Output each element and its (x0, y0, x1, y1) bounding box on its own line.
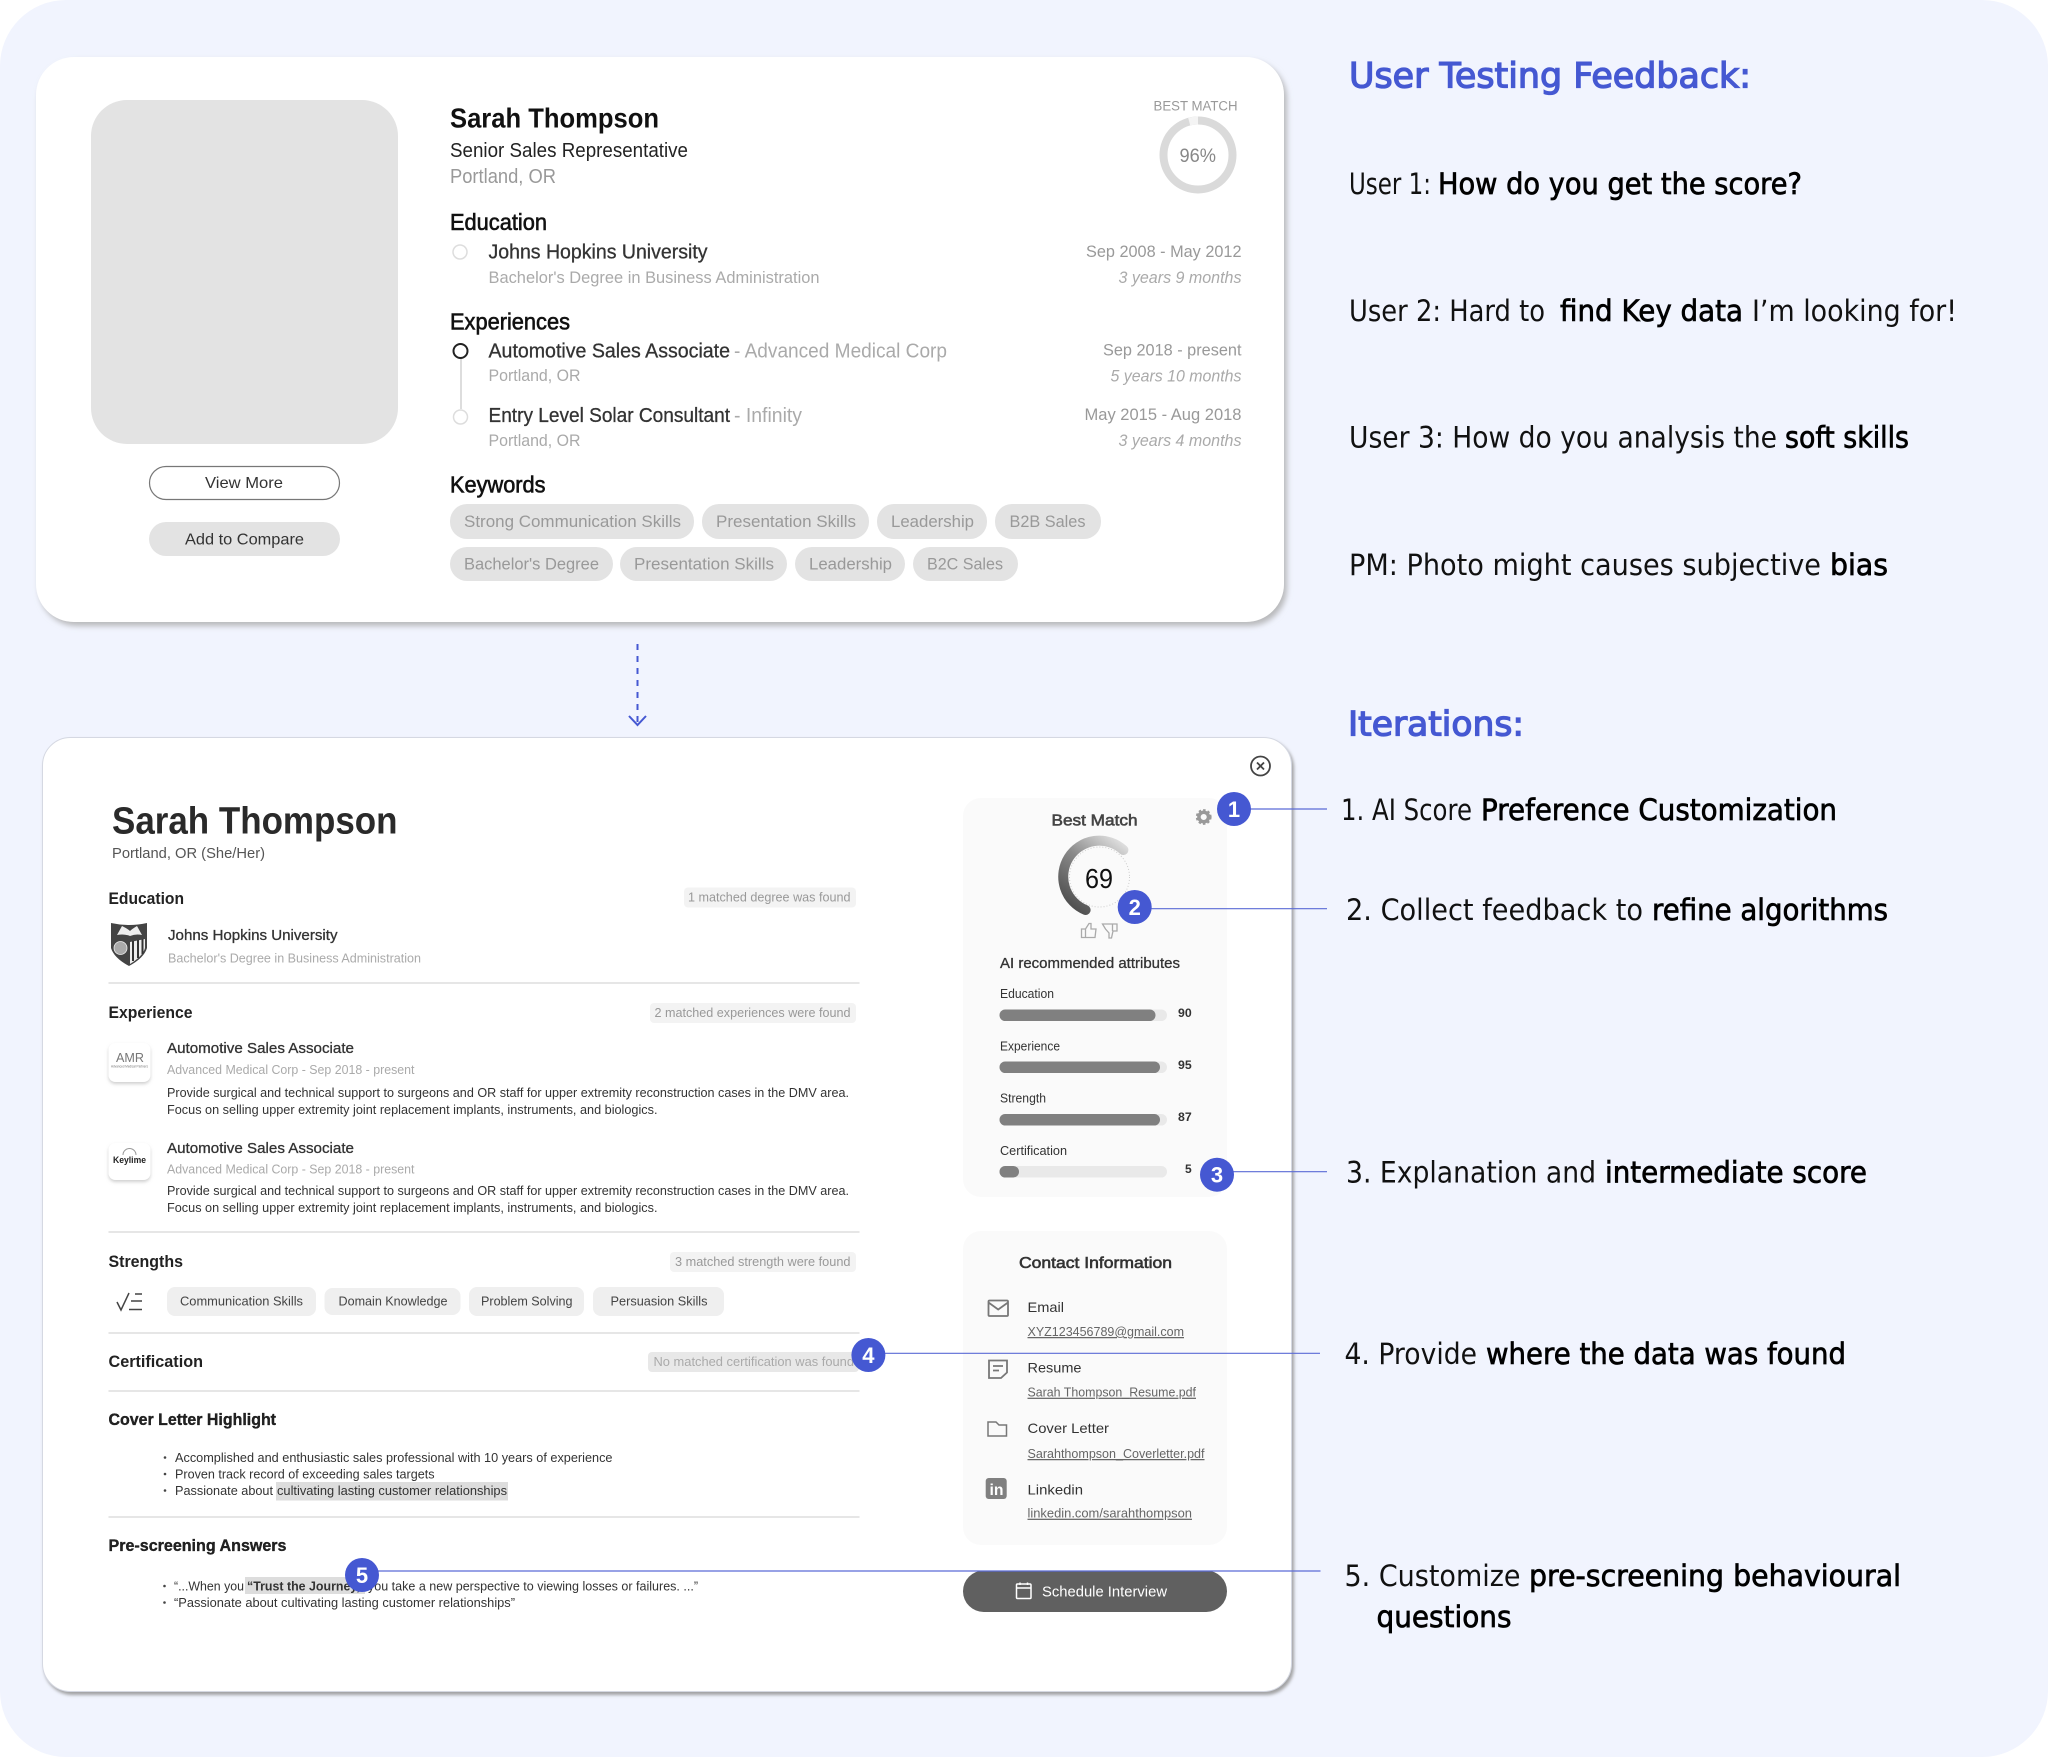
iteration 1: 1. AI Score (1341, 793, 1472, 827)
candidate name and role: Portland, OR (450, 166, 556, 188)
gauge: score 69: 69 (1085, 863, 1113, 894)
feedback: user 2 (1349, 294, 1957, 328)
keywords section: Strong Communication Skills (464, 512, 681, 531)
cover letter highlight (108, 1410, 612, 1500)
badge 5: 5 (356, 1563, 368, 1588)
panel: contact information: Sarah Thompson_Resume.pdf (1028, 1386, 1197, 1400)
education block: Bachelor's Degree in Business Administration (168, 950, 421, 966)
education section: 3 years 9 months (1118, 268, 1242, 287)
candidate name and role: Sarah Thompson (450, 102, 659, 134)
button: add to compare: Add to Compare (185, 532, 304, 548)
heading: user testing feedback: User Testing Feedback: (1349, 56, 1751, 96)
education section: Bachelor's Degree in Business Administration (488, 268, 820, 287)
button: add to compare (149, 522, 340, 556)
education block: Education (108, 889, 184, 908)
attribute bars: Strength (1000, 1092, 1046, 1106)
cover letter highlight: Passionate about (175, 1483, 273, 1498)
keywords section: Bachelor's Degree (464, 554, 599, 574)
experiences section: 3 years 4 months (1118, 431, 1242, 450)
feedback: PM: PM: Photo might causes subjective (1349, 548, 1821, 582)
icon: settings gear (1197, 810, 1211, 824)
pre-screening answers: you take a new perspective to viewing losses or failures. ...” (368, 1578, 698, 1594)
feedback: user 2: User 2: Hard to (1349, 294, 1545, 328)
experiences section: Portland, OR (488, 366, 580, 385)
pre-screening answers: Pre-screening Answers (108, 1536, 286, 1555)
certification block: No matched certification was found (654, 1355, 854, 1369)
iteration 5 (1344, 1559, 1901, 1634)
iteration 4: 4. Provide (1344, 1337, 1477, 1371)
cover letter highlight: Accomplished and enthusiastic sales professional with 10 years of experience (175, 1450, 612, 1465)
candidate header (112, 800, 398, 862)
panel: contact information: linkedin.com/sarahthompson (1028, 1507, 1192, 1521)
badge 5 (345, 1558, 379, 1592)
strengths block (108, 1252, 856, 1316)
icon: checklist (117, 1293, 142, 1310)
best match score donut (1154, 98, 1238, 190)
keywords section: B2C Sales (927, 554, 1003, 574)
iteration 2 (1346, 893, 1888, 927)
connector lines from badges to iteration notes (370, 809, 1327, 1571)
experience block: Automotive Sales Associate (167, 1141, 354, 1157)
attribute bars: Experience (1000, 1040, 1060, 1054)
feedback: user 2: find Key data (1560, 294, 1743, 328)
icon: university shield (111, 923, 147, 966)
iteration 1 (1341, 793, 1837, 827)
iteration 5: 5. Customize (1344, 1559, 1520, 1593)
strengths block: Problem Solving (481, 1294, 572, 1308)
feedback: PM: bias (1830, 548, 1888, 582)
iteration 5: pre-screening behavioural (1529, 1559, 1901, 1593)
iteration 2: refine algorithms (1652, 893, 1888, 927)
badge 4 (851, 1338, 885, 1372)
panel: contact information: XYZ123456789@gmail.com (1028, 1325, 1184, 1339)
badge 1: 1 (1228, 797, 1240, 822)
logo: Keylime: Keylime (113, 1155, 146, 1166)
pre-screening answers: “...When you (174, 1578, 244, 1594)
education block: Johns Hopkins University (168, 928, 338, 944)
cover letter highlight: cultivating lasting customer relationships (277, 1483, 507, 1498)
experiences section: Automotive Sales Associate (488, 340, 730, 362)
experiences section: Sep 2018 - present (1103, 340, 1242, 360)
panel: contact information: Cover Letter (1028, 1420, 1109, 1436)
gauge: score 69 (1063, 841, 1130, 910)
icon: folder (988, 1422, 1006, 1436)
certification block (108, 1352, 859, 1372)
iteration 3: 3. Explanation and (1346, 1156, 1596, 1190)
experiences section: 5 years 10 months (1110, 366, 1242, 386)
experiences section (450, 308, 1242, 450)
panel: contact information: Linkedin (1028, 1482, 1083, 1498)
candidate header: Portland, OR (She/Her) (112, 845, 265, 862)
panel: best match score: Best Match (1052, 812, 1138, 830)
panel: contact information: Resume (1028, 1360, 1082, 1376)
badge 2: 2 (1129, 895, 1141, 920)
keywords section: Keywords (450, 472, 546, 498)
button: schedule interview (963, 1570, 1227, 1612)
iteration 3: intermediate score (1605, 1156, 1867, 1190)
experience block (108, 1003, 856, 1215)
panel: contact information: Contact Information (1019, 1255, 1172, 1272)
iteration 3 (1346, 1156, 1867, 1190)
pre-screening answers (108, 1536, 698, 1610)
iteration 1: Preference Customization (1481, 793, 1837, 827)
experiences section: - Infinity (734, 405, 802, 427)
badge 3 (1200, 1158, 1234, 1192)
experience block: Automotive Sales Associate (167, 1041, 354, 1057)
feedback: user 3: User 3: How do you analysis the (1349, 420, 1777, 454)
badge 1 (1217, 792, 1251, 826)
iteration 2: 2. Collect feedback to (1346, 893, 1643, 927)
badge 4: 4 (862, 1343, 875, 1368)
keywords section: B2B Sales (1010, 512, 1086, 531)
panel: contact information: Email (1028, 1299, 1064, 1315)
icon: close (1251, 756, 1270, 776)
logo: AMR (108, 1043, 150, 1082)
keywords section: Presentation Skills (716, 512, 856, 531)
candidate name and role: Senior Sales Representative (450, 140, 688, 162)
feedback: user 1: User 1: (1349, 167, 1431, 201)
strengths block: 3 matched strength were found (675, 1255, 851, 1269)
strengths block: Domain Knowledge (338, 1294, 448, 1308)
keywords section: Leadership (809, 554, 892, 574)
pre-screening answers: “Passionate about cultivating lasting customer relationships” (174, 1595, 515, 1610)
heading: iterations: Iterations: (1348, 704, 1524, 744)
icon: linkedin (986, 1478, 1007, 1499)
best match score donut: 96% (1180, 146, 1216, 167)
panel: contact information (963, 1231, 1227, 1545)
education block: 1 matched degree was found (688, 890, 851, 904)
experience block: Focus on selling upper extremity joint replacement implants, instruments, and biologics. (167, 1102, 658, 1117)
attribute bars: 90 (1178, 1006, 1192, 1020)
panel: best match score: AI recommended attributes (1000, 956, 1180, 972)
logo: AMR: AMR (116, 1051, 144, 1065)
education section: Sep 2008 - May 2012 (1086, 242, 1242, 261)
experience block: 2 matched experiences were found (654, 1006, 851, 1020)
education section: Education (450, 209, 547, 235)
icon: resume (989, 1360, 1007, 1378)
experience block: Provide surgical and technical support to surgeons and OR staff for upper extremity reconstruction cases in the DMV area. (167, 1183, 849, 1198)
strengths block: Communication Skills (180, 1294, 303, 1308)
panel: redesigned candidate detail (42, 738, 1292, 1692)
education section: Johns Hopkins University (488, 242, 708, 264)
keywords section: Leadership (891, 512, 974, 531)
certification block: Certification (108, 1352, 203, 1371)
button: view more (150, 466, 340, 500)
feedback: user 2: I’m looking for! (1752, 294, 1957, 328)
attribute bars: 87 (1178, 1110, 1192, 1124)
experiences section: - Advanced Medical Corp (734, 340, 947, 362)
panel: best match score (963, 798, 1227, 1197)
strengths block: Strengths (108, 1252, 183, 1271)
feedback: user 3: soft skills (1785, 420, 1909, 454)
cover letter highlight: Proven track record of exceeding sales targets (175, 1466, 435, 1482)
panel: contact information: Sarahthompson_Coverletter.pdf (1028, 1447, 1205, 1461)
icon: email (988, 1300, 1008, 1316)
candidate header: Sarah Thompson (112, 800, 398, 842)
experience block: Experience (108, 1003, 192, 1022)
experiences section: Entry Level Solar Consultant (488, 405, 730, 427)
button: schedule interview: Schedule Interview (1042, 1584, 1168, 1600)
attribute bars: Certification (1000, 1144, 1067, 1158)
experiences section: Portland, OR (488, 431, 580, 450)
icon: calendar (1016, 1582, 1031, 1598)
icons: thumbs up and down (1082, 924, 1117, 938)
pre-screening answers: “Trust the Journey,” (247, 1578, 366, 1594)
education block (108, 888, 856, 966)
strengths block: Persuasion Skills (610, 1294, 708, 1308)
panel: original candidate card (36, 57, 1284, 622)
keywords section: Presentation Skills (634, 554, 774, 574)
experience block: Focus on selling upper extremity joint replacement implants, instruments, and biologics. (167, 1200, 658, 1215)
experience block: Advanced Medical Corp - Sep 2018 - present (167, 1162, 415, 1176)
iteration 5: questions (1376, 1600, 1512, 1634)
iteration 4: where the data was found (1486, 1337, 1846, 1371)
attribute bars: Education (1000, 987, 1054, 1001)
logo: AMR: Advanced Medical Partners (111, 1064, 148, 1068)
experiences section: Experiences (450, 308, 570, 334)
attribute bars: 95 (1178, 1058, 1192, 1072)
candidate name and role (450, 102, 688, 188)
education section (450, 209, 1242, 287)
experience block: Advanced Medical Corp - Sep 2018 - present (167, 1062, 415, 1077)
badge 3: 3 (1211, 1163, 1223, 1188)
button: view more: View More (205, 475, 283, 492)
experiences section: May 2015 - Aug 2018 (1084, 405, 1242, 424)
attribute bars: 5 (1185, 1162, 1192, 1176)
feedback: user 1: How do you get the score? (1438, 167, 1802, 201)
experience block: Provide surgical and technical support to surgeons and OR staff for upper extremity reconstruction cases in the DMV area. (167, 1085, 849, 1100)
iteration 4 (1344, 1337, 1846, 1371)
arrow: dashed from original to iteration (629, 644, 646, 725)
logo: Keylime (108, 1143, 150, 1180)
keywords section (450, 472, 1101, 581)
cover letter highlight: Cover Letter Highlight (108, 1410, 276, 1429)
icon: linkedin: in (990, 1482, 1004, 1499)
best match score donut: BEST MATCH (1154, 98, 1238, 114)
badge 2 (1118, 890, 1152, 924)
photo placeholder (91, 100, 398, 444)
attribute bars (1000, 987, 1192, 1178)
